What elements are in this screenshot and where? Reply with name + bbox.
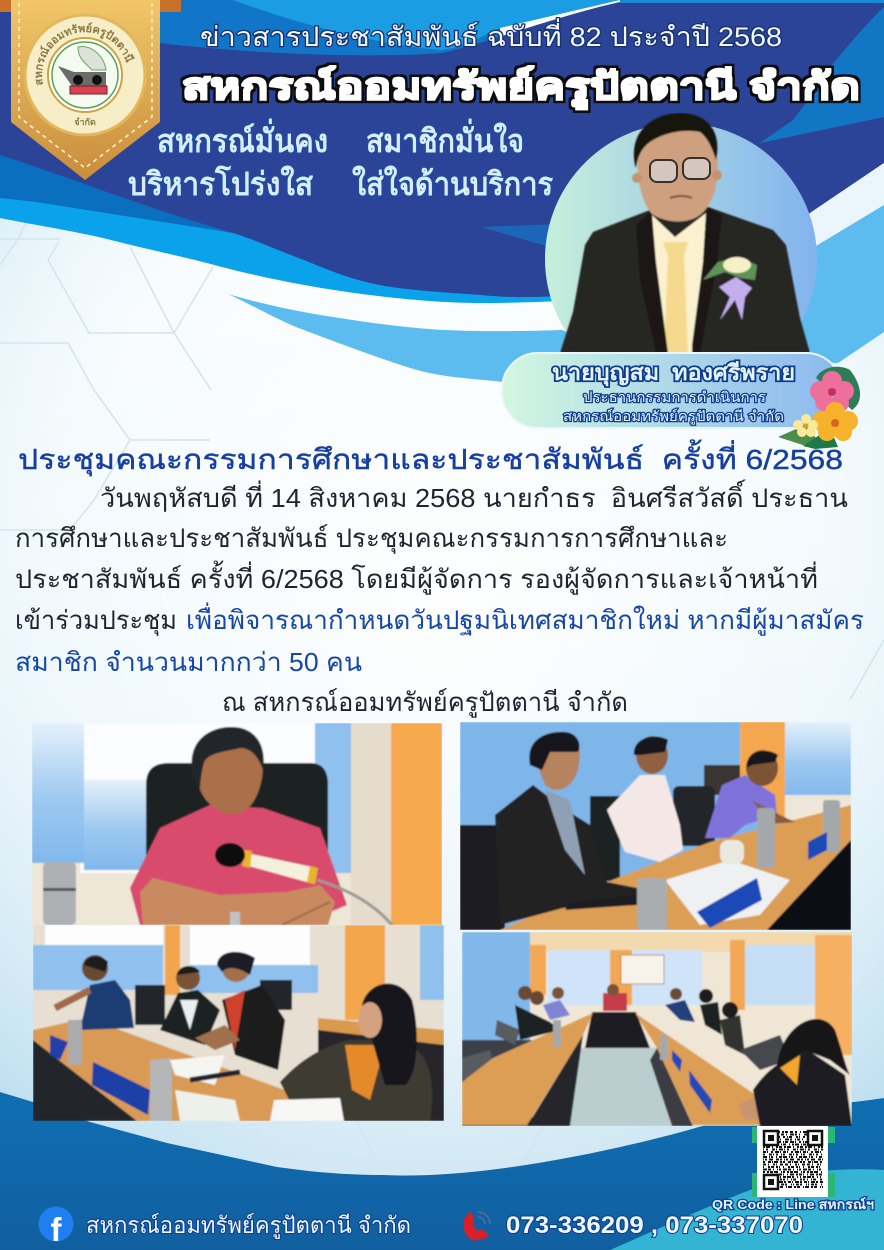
header wave bands	[0, 0, 884, 382]
icon: facebook	[38, 1206, 74, 1248]
article body text: เพื่อพิจารณากำหนดวันปฐมนิเทศสมาชิกใหม่ หากมีผู้มาสมัคร	[186, 602, 864, 636]
motto	[128, 118, 553, 202]
badge: cooperative logo: สหกรณ์ออมทรัพย์ครูปัตตานี	[35, 22, 135, 86]
badge: cooperative logo: จำกัด	[74, 117, 96, 127]
name plate	[502, 353, 842, 428]
chairman position	[563, 389, 784, 425]
QR code: LINE account	[752, 1126, 835, 1197]
main title: สหกรณ์ออมทรัพย์ครูปัตตานี จำกัด	[182, 66, 860, 110]
article body text: ณ สหกรณ์ออมทรัพย์ครูปัตตานี จำกัด	[222, 687, 628, 718]
phone numbers: 073-336209 , 073-337070	[506, 1212, 803, 1239]
motto: บริหารโปร่งใส	[128, 165, 313, 202]
QR caption: QR Code : Line สหกรณ์ฯ	[712, 1197, 874, 1212]
icon: telephone	[463, 1212, 490, 1240]
photo: three committee members	[460, 722, 851, 930]
photo: meeting room overview	[462, 932, 852, 1126]
header issue line: ข่าวสารประชาสัมพันธ์ ฉบับที่ 82 ประจำปี 2568	[200, 18, 782, 52]
motto: สมาชิกมั่นใจ	[366, 118, 524, 159]
facebook page name: สหกรณ์ออมทรัพย์ครูปัตตานี จำกัด	[86, 1212, 411, 1239]
article body text	[15, 479, 864, 718]
chairman position: ประธานกรรมการดำเนินการ	[583, 389, 767, 405]
article body text: เข้าร่วมประชุม	[15, 605, 177, 636]
footer wave	[0, 1092, 884, 1250]
photo: committee chair speaking	[32, 723, 442, 925]
motto: สหกรณ์มั่นคง	[157, 118, 328, 159]
icon: facebook: f	[50, 1211, 62, 1248]
article body text: สมาชิก จำนวนมากกว่า 50 คน	[15, 647, 362, 677]
chairman name: นายบุญสม ทองศรีพราย	[552, 360, 795, 387]
portrait of chairman	[545, 113, 817, 352]
article heading: ประชุมคณะกรรมการศึกษาและประชาสัมพันธ์ ครั้งที่ 6/2568	[18, 439, 843, 477]
photo: committee members at table	[33, 925, 444, 1121]
motto: ใส่ใจด้านบริการ	[352, 165, 553, 202]
article body text: วันพฤหัสบดี ที่ 14 สิงหาคม 2568 นายกำธร อินศรีสวัสดิ์ ประธาน	[100, 479, 848, 513]
article body text: การศึกษาและประชาสัมพันธ์ ประชุมคณะกรรมการการศึกษาและ	[15, 523, 728, 554]
article body text: ประชาสัมพันธ์ ครั้งที่ 6/2568 โดยมีผู้จัดการ รองผู้จัดการและเจ้าหน้าที่	[15, 560, 818, 595]
badge: cooperative logo	[0, 0, 181, 180]
icon: tropical flowers	[778, 367, 860, 449]
chairman position: สหกรณ์ออมทรัพย์ครูปัตตานี จำกัด	[563, 408, 784, 425]
